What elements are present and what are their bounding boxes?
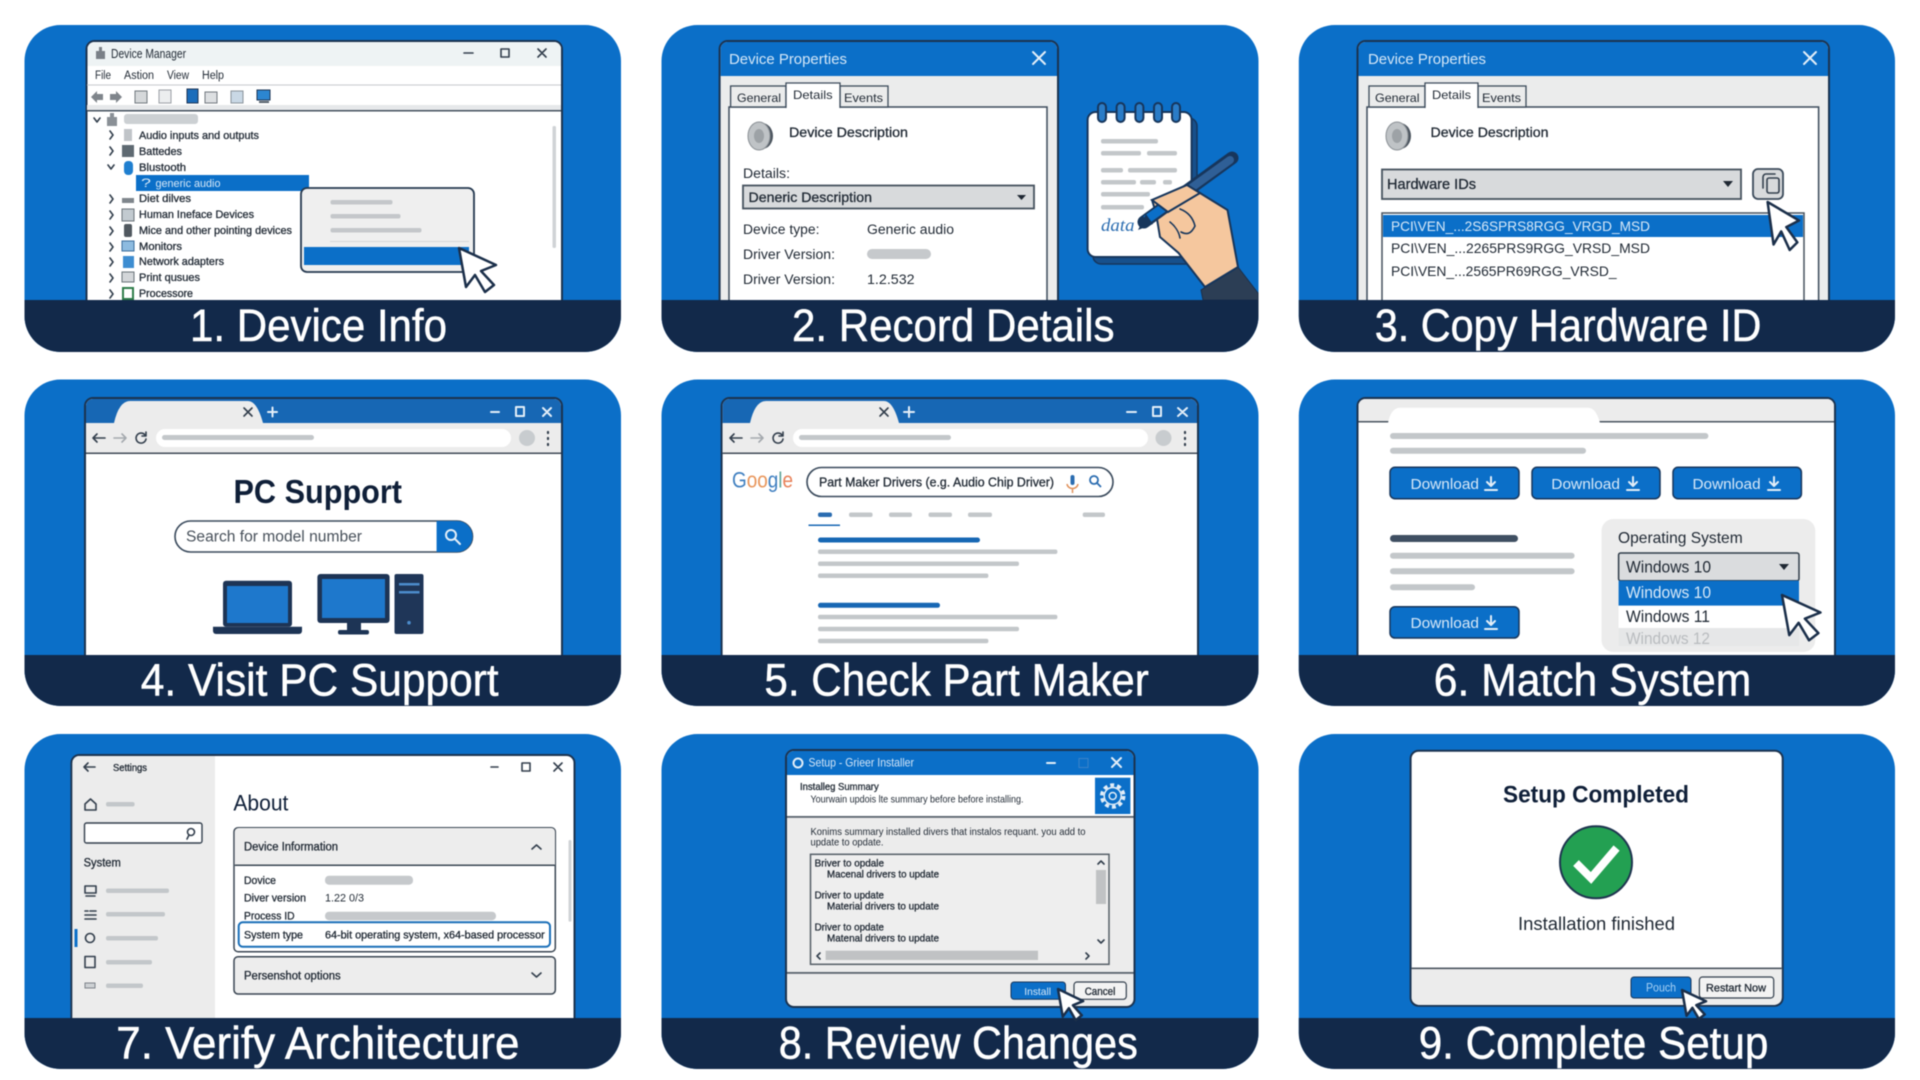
device tree: Battedes [139, 146, 182, 158]
device tree: ? [141, 176, 151, 190]
sidebar [74, 799, 202, 988]
device information section: Dovice [244, 875, 276, 887]
panel: step 7 verify architecture [24, 734, 621, 1069]
icon: speaker [748, 122, 773, 150]
device tree: Monitors [139, 241, 183, 253]
list: drivers to update: Driver to opdate [815, 921, 884, 933]
download buttons: Download [1692, 476, 1761, 493]
list: drivers to update: Macenal drivers to update [827, 868, 939, 880]
operating system selector: Windows 12 [1626, 630, 1710, 648]
window: download page [1358, 398, 1835, 683]
device information section: Diver version [244, 893, 306, 905]
search bar [175, 521, 472, 552]
panel: step 9 complete setup [1299, 734, 1895, 1069]
panel: step 8 review changes [662, 734, 1258, 1069]
button: cancel [1074, 982, 1126, 999]
title band: step 7: 7. Verify Architecture [116, 1018, 519, 1069]
list: hardware ids: PCI\VEN_...2565PR69RGG_VRSD_ [1391, 263, 1617, 279]
dropdown: hardware ids: Hardware IDs [1387, 177, 1476, 193]
search bar [807, 468, 1113, 496]
title band: step 2: 2. Record Details [792, 300, 1114, 351]
title band: step 6: 6. Match System [1434, 654, 1751, 706]
download buttons: Download [1410, 476, 1479, 493]
tabs: Events [844, 91, 883, 105]
icon: mouse cursor [1682, 990, 1706, 1019]
illustration: notepad [1088, 103, 1197, 264]
icon: mouse cursor [459, 248, 496, 292]
window: settings about: About [233, 791, 288, 816]
window: setup driver installer: Konims summary installed divers that instalos requant. you add to [810, 826, 1086, 838]
title band: step 4 [24, 654, 621, 706]
search bar: Search for model number [186, 529, 362, 546]
illustration: hand writing with pen [1138, 158, 1258, 300]
icon: settings gear [1095, 778, 1130, 814]
device tree: Audio inputs and outputs [139, 130, 259, 142]
window: device properties: Device Description [789, 125, 908, 140]
list: drivers to update: Briver to opdale [815, 858, 884, 870]
window: device manager [86, 41, 562, 331]
device tree: Mice and other pointing devices [139, 225, 292, 237]
persenshot options section: Persenshot options [244, 971, 341, 983]
list: drivers to update [810, 854, 1109, 964]
panel: step 3 copy hardware id [1299, 25, 1895, 352]
panel: step 5 check part maker [662, 380, 1258, 706]
icon: mouse cursor [1768, 202, 1799, 250]
device information section: 1.22 0/3 [325, 893, 364, 905]
button: finish [1631, 977, 1691, 998]
dropdown: description [743, 186, 1034, 208]
icon: desktop computer [317, 574, 424, 634]
operating system selector [1602, 519, 1815, 652]
title band: step 8: 8. Review Changes [779, 1018, 1138, 1069]
tabs [729, 83, 1047, 337]
title band: step 7 [24, 1018, 621, 1069]
title band: step 8 [662, 1018, 1258, 1069]
window: settings about: Settings [113, 762, 147, 774]
window: setup driver installer: Setup - Grieer Installer [808, 756, 914, 770]
window: setup driver installer: Yourwain updois lte summary before before installing. [810, 793, 1024, 805]
device tree: Processore [139, 288, 193, 300]
device information section: 64-bit operating system, x64-based processor [325, 929, 545, 941]
operating system selector: Operating System [1618, 530, 1743, 547]
window: setup driver installer: update to opdate. [810, 837, 884, 849]
device tree [94, 113, 309, 300]
button: cancel: Cancel [1085, 986, 1115, 998]
device tree: Blustooth [139, 162, 186, 174]
button: restart now: Restart Now [1706, 983, 1766, 995]
window: device properties hardware ids: Device Description [1430, 125, 1548, 140]
list: hardware ids: PCI\VEN_...2265PRS9RGG_VRSD_MSD [1391, 240, 1650, 256]
list: hardware ids: PCI\VEN_...2S6SPRS8RGG_VRGD_MSD [1391, 218, 1650, 234]
sidebar: System [84, 856, 121, 870]
window: device properties: 1.2.532 [867, 272, 915, 287]
window: device manager: Astion [124, 70, 154, 82]
button: install [1011, 982, 1066, 999]
window: device properties: Generic audio [867, 222, 954, 237]
window: device properties: Driver Version: [743, 247, 835, 262]
title band: step 5: 5. Check Part Maker [764, 654, 1149, 706]
device tree: Human Ineface Devices [139, 209, 254, 221]
list: drivers to update: Material drivers to update [827, 900, 939, 912]
toolbar icons [91, 89, 270, 103]
panel: step 4 visit pc support [24, 380, 621, 706]
window: setup completed: Installation finished [1518, 914, 1675, 934]
title band: step 3 [1299, 300, 1895, 352]
title band: step 1: 1. Device Info [190, 300, 447, 351]
window: setup completed [1411, 751, 1783, 1006]
device information section: System type [244, 929, 303, 941]
window: browser search [722, 398, 1198, 683]
icon: copy button [1753, 169, 1783, 199]
icon: laptop [213, 581, 302, 634]
list: drivers to update: Driver to update [815, 889, 884, 901]
search bar: Part Maker Drivers (e.g. Audio Chip Driver) [819, 475, 1054, 490]
window: device manager: View [167, 70, 190, 82]
title band: step 3: 3. Copy Hardware ID [1375, 300, 1761, 351]
title band: step 9 [1299, 1018, 1895, 1069]
window: device properties [720, 41, 1058, 337]
window: browser [85, 398, 562, 683]
tabs: General [1375, 91, 1420, 105]
title band: step 9: 9. Complete Setup [1419, 1018, 1768, 1069]
tabs: Details [793, 88, 833, 102]
operating system selector: Windows 10 [1626, 559, 1711, 577]
window: setup driver installer: Installeg Summary [800, 781, 879, 793]
window: device properties hardware ids: Device Properties [1368, 52, 1486, 68]
icon: success check [1560, 826, 1632, 898]
device tree: Diet dilves [139, 193, 192, 205]
window: setup driver installer [786, 750, 1134, 1007]
download buttons [1390, 467, 1801, 499]
list: hardware ids [1382, 213, 1804, 333]
download button [1390, 607, 1519, 638]
window: device properties: Driver Version: [743, 272, 835, 287]
tabs [1367, 83, 1819, 337]
title band: step 1 [24, 300, 621, 352]
device information section: Device Information [244, 842, 338, 854]
dropdown: description: Deneric Description [748, 189, 872, 205]
panel: step 1 device info [24, 25, 621, 352]
download button: Download [1410, 615, 1479, 632]
device tree: generic audio [156, 178, 220, 190]
operating system selector: Windows 11 [1626, 608, 1710, 626]
list: drivers to update: Matenal drivers to update [827, 932, 939, 944]
tabs: Events [1482, 91, 1521, 105]
icon: mouse cursor [1058, 989, 1083, 1020]
icon: speaker [1386, 122, 1411, 150]
panel: step 6 match system [1299, 380, 1895, 706]
button: install: Install [1024, 986, 1051, 998]
window: settings about [71, 755, 575, 1040]
window: device manager: Device Manager [111, 47, 186, 61]
device information section [234, 828, 555, 952]
download buttons: Download [1551, 476, 1620, 493]
device information section: Process ID [244, 910, 295, 922]
title band: step 2 [662, 300, 1258, 352]
window: device properties: Device Properties [729, 52, 847, 68]
window: device properties: Details: [743, 166, 790, 181]
search result tabs [808, 512, 1105, 526]
persenshot options section [234, 957, 555, 994]
operating system selector: Windows 10 [1626, 584, 1711, 602]
window: browser: PC Support [234, 473, 402, 510]
search results [818, 538, 1057, 643]
illustration: notepad: data [1101, 215, 1134, 235]
tabs: Details [1432, 88, 1471, 102]
button: finish: Pouch [1646, 983, 1676, 995]
dropdown: hardware ids [1382, 170, 1741, 199]
tabs: General [737, 91, 781, 105]
window: device manager: Help [202, 70, 224, 82]
window: device properties hardware ids [1358, 41, 1829, 337]
context menu [301, 188, 474, 272]
title band: step 6 [1299, 654, 1895, 706]
title band: step 5 [662, 654, 1258, 706]
device tree: Network adapters [139, 256, 224, 268]
panel: step 2 record details [662, 25, 1258, 352]
title band: step 4: 4. Visit PC Support [141, 654, 499, 706]
icon: mouse cursor [1782, 595, 1820, 640]
window: device properties: Device type: [743, 222, 820, 237]
button: restart now [1699, 977, 1774, 998]
logo: google: Google [732, 468, 793, 493]
device tree: Print qusues [139, 272, 200, 284]
window: setup completed: Setup Completed [1503, 782, 1689, 808]
window: device manager: File [95, 70, 111, 82]
